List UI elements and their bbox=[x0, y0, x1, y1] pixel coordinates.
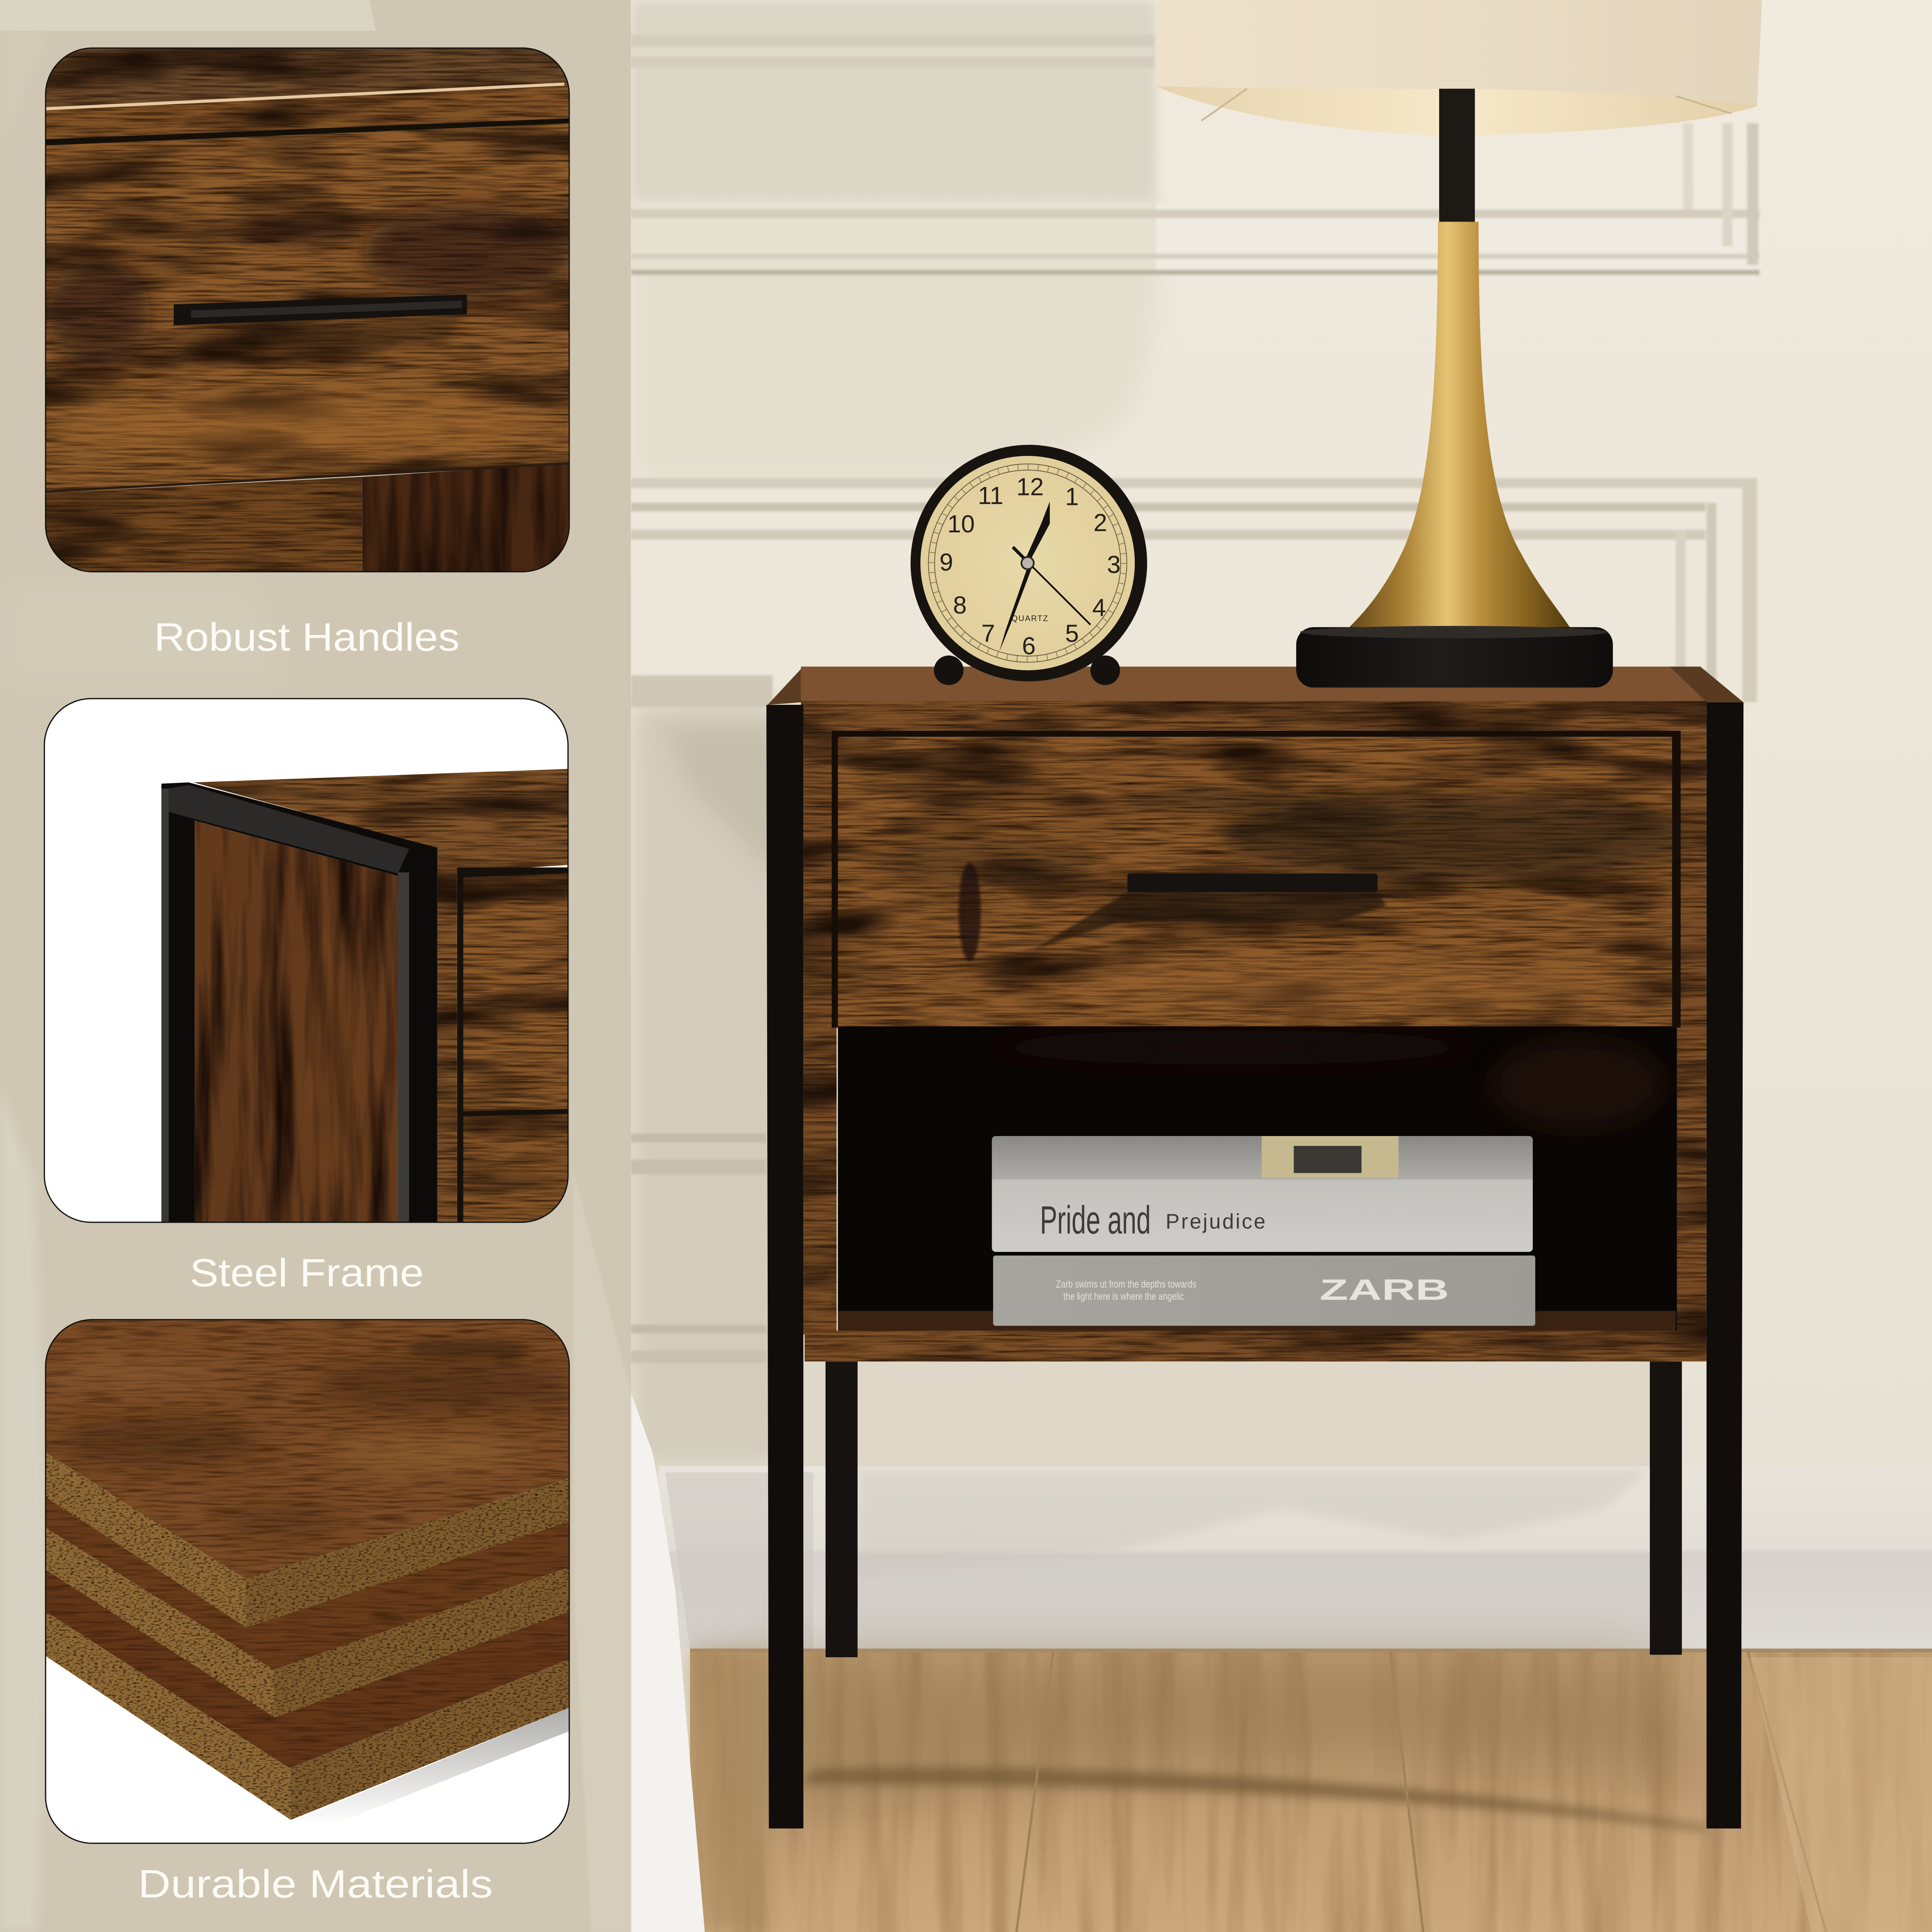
baseboard bbox=[659, 1466, 1932, 1649]
bed bbox=[631, 1392, 705, 1932]
drawer handle bbox=[1127, 874, 1378, 892]
lamp pole bbox=[1439, 89, 1475, 222]
clock numerals: 10 bbox=[948, 510, 975, 538]
bottom book: Zarb swims ut from the depths towards bbox=[1056, 1279, 1197, 1290]
clock numerals: 3 bbox=[1107, 551, 1121, 579]
wall shadow bbox=[631, 0, 1676, 1473]
top surface bbox=[194, 769, 568, 849]
drawer handle bbox=[174, 295, 467, 325]
steel frame bbox=[161, 782, 437, 1222]
clock numerals: 8 bbox=[953, 592, 967, 619]
bottom book: the light here is where the angelic bbox=[1063, 1291, 1184, 1303]
bottom book bbox=[993, 1255, 1535, 1326]
clock numerals: 11 bbox=[978, 482, 1003, 510]
books bbox=[992, 1136, 1535, 1326]
drawer recess bbox=[832, 731, 1681, 1027]
lamp shade bbox=[1156, 0, 1762, 136]
room background bbox=[631, 0, 1932, 1932]
lower drawer bbox=[463, 1114, 568, 1222]
alarm clock bbox=[911, 445, 1147, 685]
nightstand bbox=[766, 667, 1744, 1829]
top board surface bbox=[46, 1320, 573, 1578]
clock numerals: 5 bbox=[1065, 620, 1079, 647]
top book bbox=[992, 1136, 1533, 1252]
clock feet bbox=[934, 656, 1120, 685]
drawer gap bbox=[457, 867, 568, 1222]
card: steel frame bbox=[44, 699, 568, 1222]
wall bbox=[631, 0, 1932, 1473]
tabletop strip bbox=[46, 48, 569, 140]
wall moulding bbox=[631, 34, 1759, 1363]
top front edge bbox=[801, 701, 1707, 731]
upper drawer bbox=[463, 874, 568, 1112]
clock numerals: 6 bbox=[1022, 632, 1036, 660]
clock numerals bbox=[939, 474, 1121, 660]
front legs bbox=[766, 702, 1744, 1829]
drawer front bbox=[838, 737, 1688, 1027]
lamp base bbox=[1296, 626, 1613, 687]
card: robust handles bbox=[46, 48, 573, 572]
quartz label: QUARTZ bbox=[1012, 614, 1049, 623]
bottom shelf bbox=[805, 1331, 1707, 1361]
card outline bbox=[46, 1320, 569, 1843]
card outline bbox=[46, 48, 569, 572]
niche interior bbox=[838, 1025, 1677, 1333]
drawer wood bbox=[46, 123, 573, 493]
label: steel frame: Steel Frame bbox=[190, 1251, 424, 1295]
clock numerals: 7 bbox=[981, 620, 995, 647]
book title: Pride and bbox=[1040, 1198, 1151, 1242]
clock hands bbox=[999, 501, 1091, 652]
book subtitle: Prejudice bbox=[1166, 1210, 1265, 1233]
label: robust handles: Robust Handles bbox=[154, 615, 459, 659]
cast shadow bbox=[296, 1708, 569, 1825]
back legs bbox=[826, 1361, 1682, 1657]
clock body bbox=[911, 445, 1147, 681]
front wood post bbox=[437, 871, 457, 1222]
middle board bbox=[46, 1491, 569, 1718]
clock numerals: 12 bbox=[1016, 474, 1044, 501]
top surface bbox=[768, 667, 1744, 705]
clock numerals: 9 bbox=[939, 549, 953, 576]
floor bbox=[690, 1649, 1932, 1932]
top board edge bbox=[46, 1453, 569, 1628]
clock numerals: 2 bbox=[1094, 509, 1107, 537]
left panel bbox=[0, 0, 631, 1932]
lamp bbox=[1156, 0, 1762, 687]
clock numerals: 1 bbox=[1065, 483, 1079, 511]
label: durable materials: Durable Materials bbox=[138, 1862, 493, 1906]
clock face bbox=[920, 456, 1135, 670]
lamp gold stem bbox=[1346, 222, 1572, 631]
bottom board bbox=[46, 1565, 569, 1820]
lower section bbox=[46, 463, 569, 572]
card: durable materials bbox=[46, 1320, 573, 1843]
dark seam bbox=[46, 118, 569, 147]
bottom book: ZARB bbox=[1320, 1273, 1449, 1306]
side panel bbox=[194, 820, 398, 1222]
clock numerals: 4 bbox=[1092, 594, 1106, 622]
front top rail bbox=[437, 843, 568, 872]
card outline bbox=[44, 699, 568, 1222]
side panels bbox=[803, 731, 1707, 1334]
